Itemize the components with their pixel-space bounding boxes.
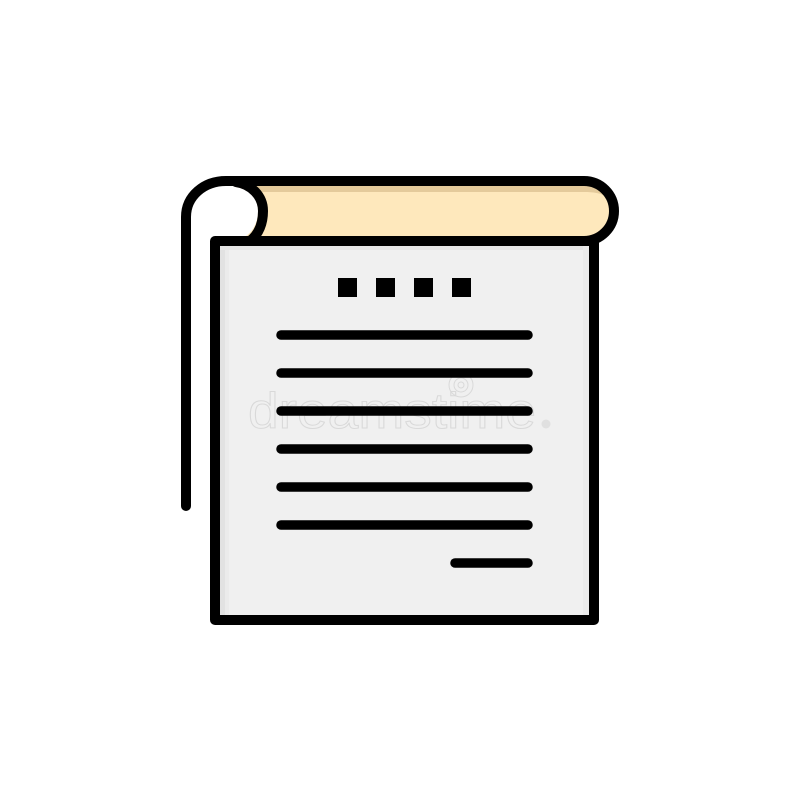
- binding outline and hanging ribbon: [186, 181, 614, 506]
- icon: notebook: [186, 181, 614, 620]
- watermark: dreamstime: [248, 383, 536, 439]
- curl interior: [191, 186, 258, 500]
- page outline: [215, 241, 594, 620]
- page: [215, 241, 594, 620]
- page text lines: [281, 335, 528, 563]
- page title dots: [338, 278, 471, 297]
- binding roll fill: [235, 181, 614, 241]
